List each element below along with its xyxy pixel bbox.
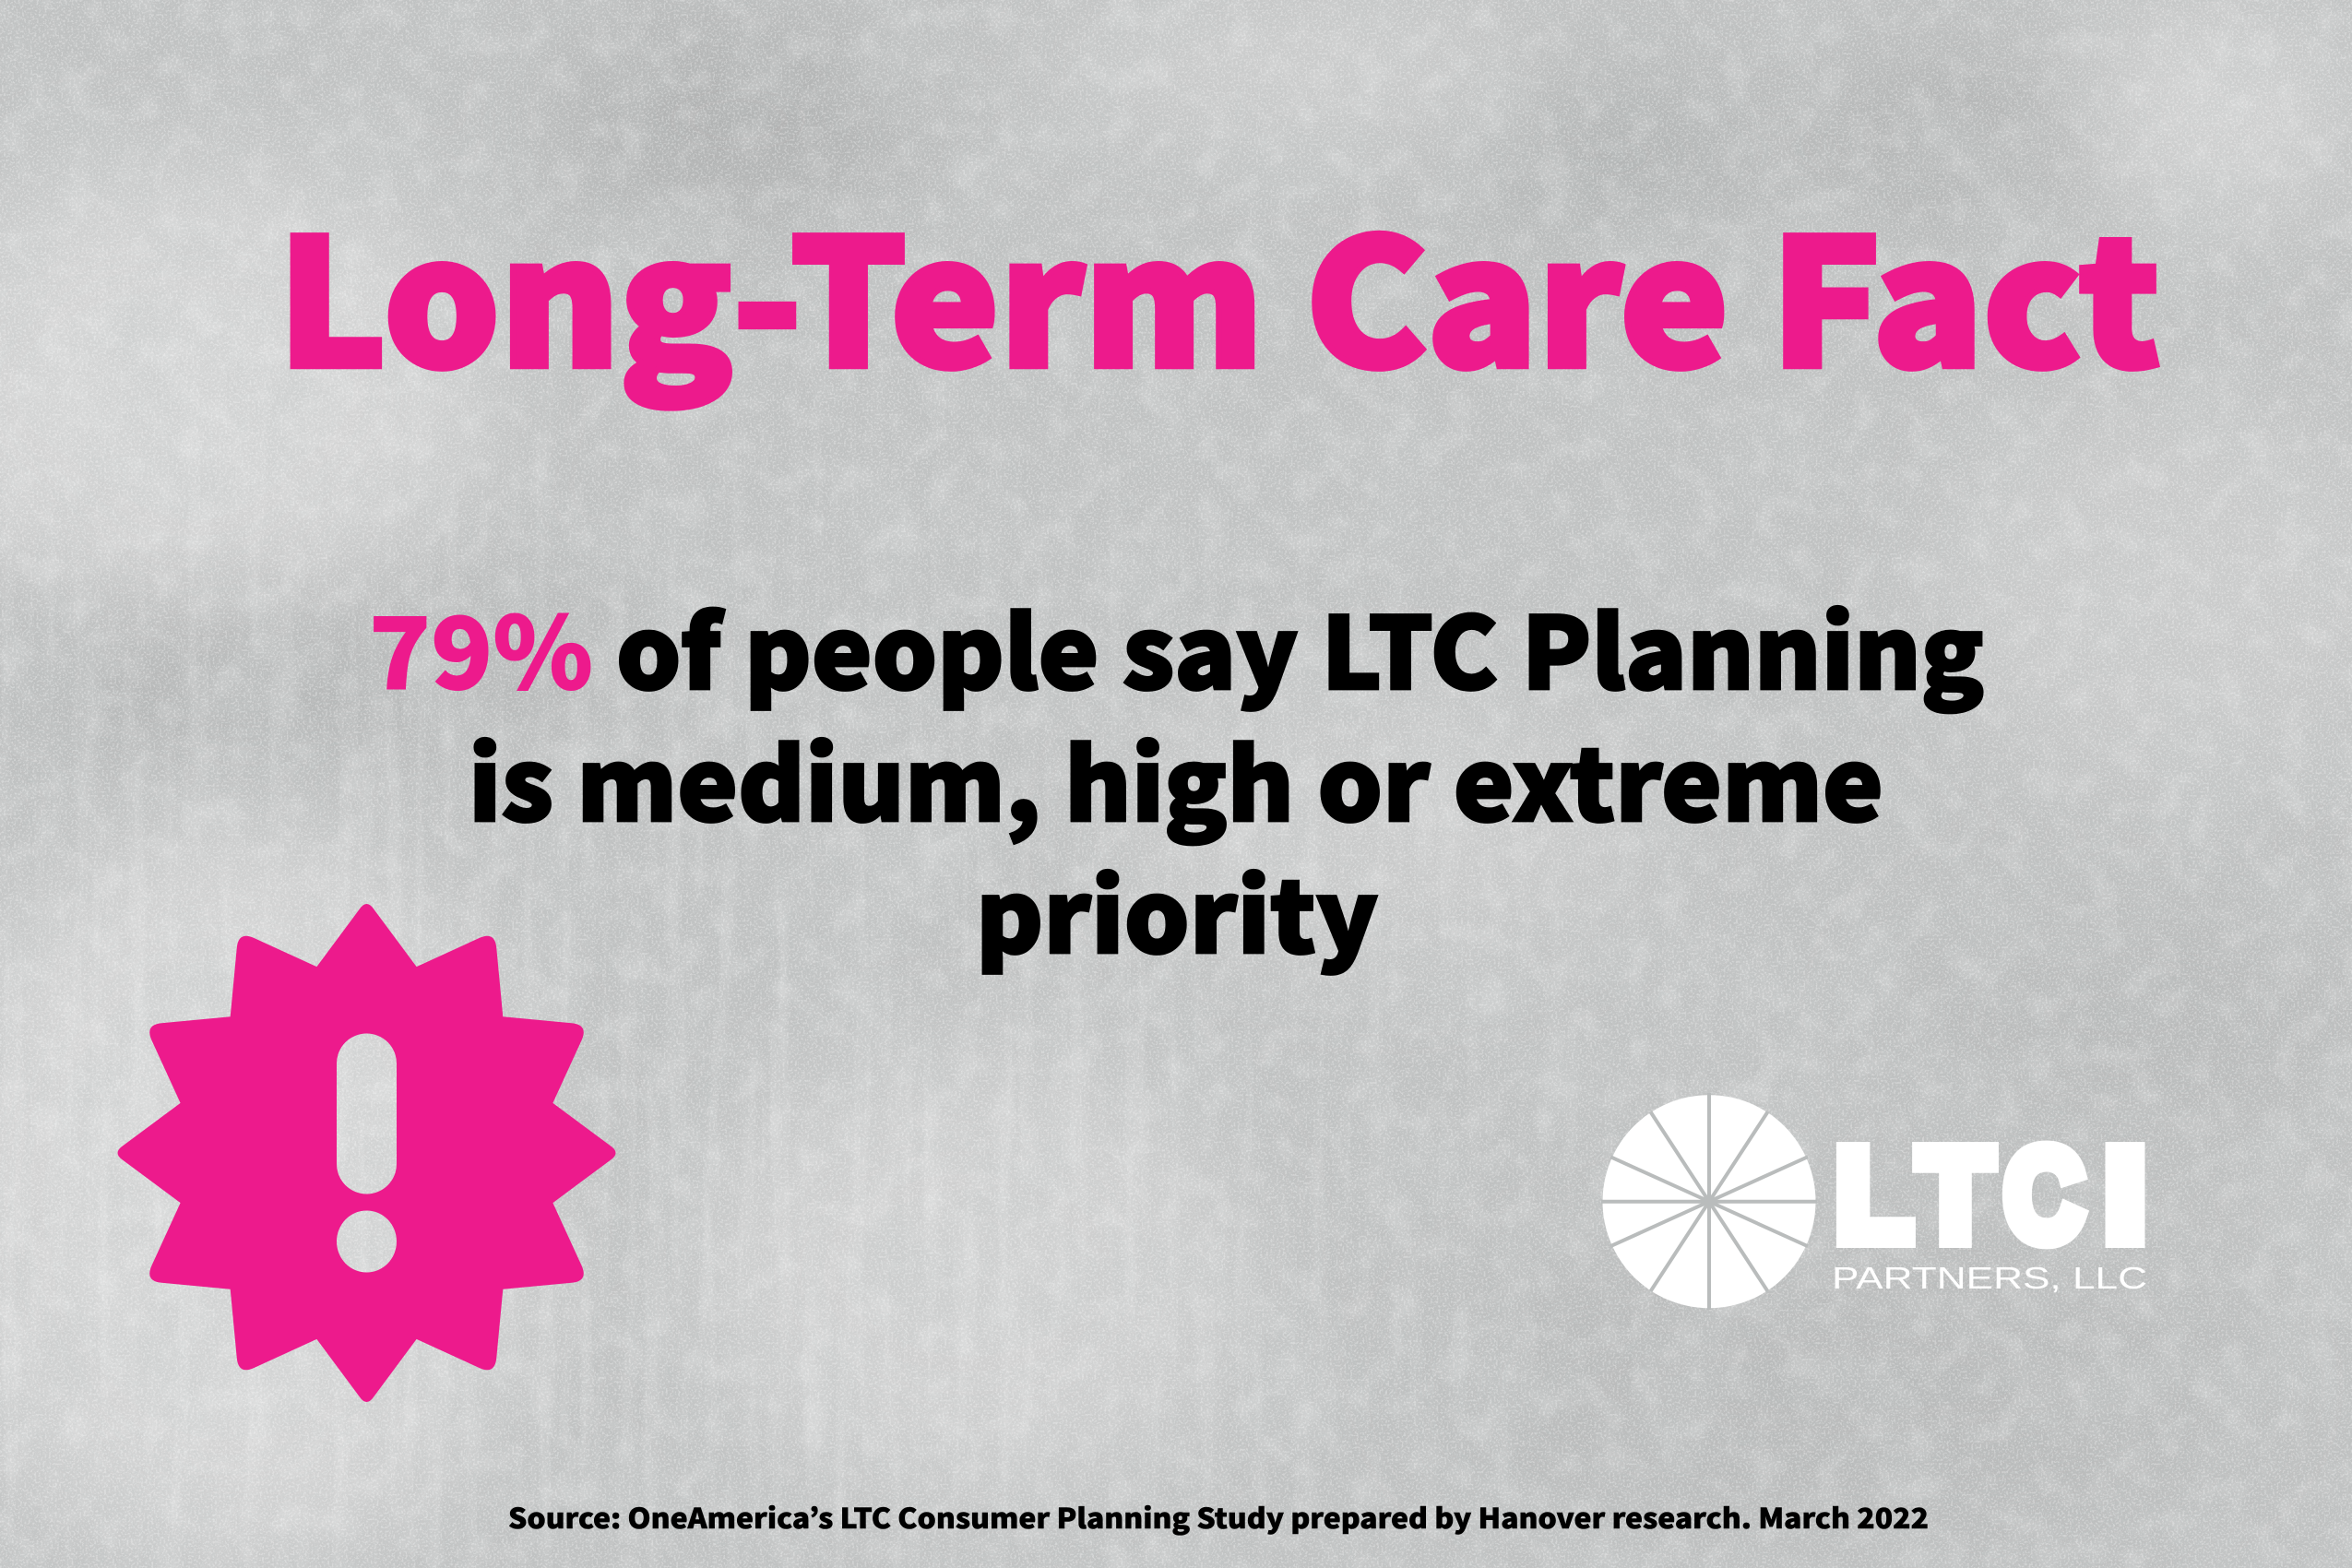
icon: pink starburst with exclamation mark — [118, 904, 616, 1402]
logo wheel mark — [1601, 1093, 1817, 1310]
logo wordmark LTCI — [1835, 1122, 2145, 1267]
logo: LTCI Partners, LLC — [1601, 1093, 2147, 1310]
statement line 3: priority — [976, 838, 1378, 982]
statement line 2: is medium, high or extreme — [469, 707, 1883, 850]
source note: Source: OneAmerica’s LTC Consumer Planning Study prepared by Hanover research. March 2022 — [508, 1496, 1929, 1537]
logo wordmark LTCI: I — [2105, 1122, 2145, 1267]
logo tagline: PARTNERS, LLC — [1832, 1261, 2147, 1295]
logo wordmark LTCI: L — [1835, 1122, 1911, 1267]
title: Long-Term Care Fact — [278, 163, 2160, 417]
logo wordmark LTCI: C — [2005, 1122, 2083, 1267]
statement text — [369, 575, 1984, 982]
statistic: 79%: 79% — [369, 575, 593, 719]
statement line 1: of people say LTC Planning — [616, 575, 1984, 719]
logo wordmark LTCI: T — [1918, 1122, 1992, 1267]
